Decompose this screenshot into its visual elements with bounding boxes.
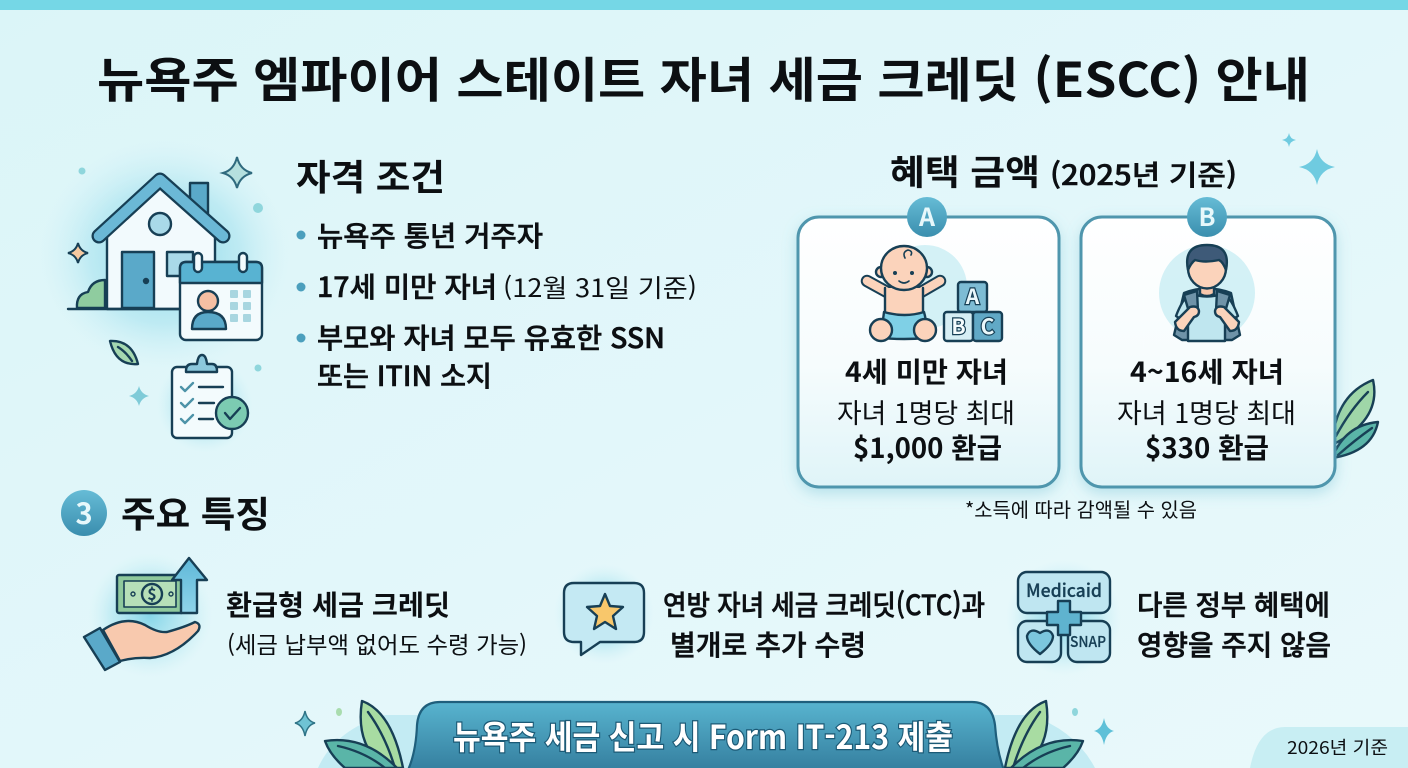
icon: side leaves bbox=[1332, 380, 1378, 458]
icon: right leaves and sparkle bbox=[1005, 701, 1114, 768]
banner text: 뉴욕주 세금 신고 시 Form IT-213 제출 bbox=[453, 711, 953, 759]
panel: eligibility bbox=[296, 149, 697, 395]
panel: benefit amounts bbox=[798, 133, 1378, 523]
text: separate: 별개로 추가 수령 bbox=[670, 624, 866, 664]
text: refundable bbox=[226, 584, 527, 660]
text: card A: 자녀 1명당 최대 bbox=[837, 392, 1015, 431]
card A bbox=[798, 197, 1059, 487]
text: separate bbox=[663, 584, 985, 664]
heading: benefit amounts: (2025년 기준) bbox=[1050, 154, 1237, 194]
bullet: SSN or ITIN bbox=[296, 317, 665, 395]
feature: refundable bbox=[84, 553, 527, 677]
panel: key features bbox=[61, 486, 1331, 677]
icon: Medicaid and SNAP tiles: Medicaid bbox=[1026, 577, 1102, 603]
bullet: age bbox=[296, 266, 697, 306]
icon: child with backpack bbox=[1159, 245, 1255, 341]
icon: clipboard checklist bbox=[172, 355, 248, 438]
text: no impact: 영향을 주지 않음 bbox=[1137, 624, 1331, 664]
date tag: 2026년 기준 bbox=[1287, 734, 1388, 760]
card B bbox=[1081, 197, 1335, 487]
text: card B bbox=[1117, 351, 1296, 467]
text: refundable: (세금 납부액 없어도 수령 가능) bbox=[227, 626, 527, 660]
text: card A: 4세 미만 자녀 bbox=[845, 351, 1008, 391]
icon: Medicaid and SNAP tiles: SNAP bbox=[1070, 631, 1106, 652]
bullet: age: 17세 미만 자녀 bbox=[317, 266, 497, 306]
text: separate: 연방 자녀 세금 크레딧(CTC)과 bbox=[663, 584, 985, 624]
feature: no impact on other benefits bbox=[1006, 560, 1331, 676]
icon: Medicaid and SNAP tiles bbox=[1006, 560, 1122, 676]
text: card A bbox=[837, 351, 1015, 467]
text: refundable: 환급형 세금 크레딧 bbox=[226, 584, 450, 624]
icon: sparkles top right bbox=[1282, 133, 1335, 185]
banner: filing instruction bbox=[295, 701, 1114, 768]
heading: key features: 주요 특징 bbox=[121, 486, 270, 538]
text: no impact bbox=[1137, 584, 1331, 664]
icon: speech bubble with star bbox=[554, 564, 654, 664]
icon: baby and blocks: C bbox=[981, 311, 995, 341]
heading: benefit amounts: 혜택 금액 bbox=[890, 145, 1040, 196]
feature: separate from federal credit bbox=[554, 564, 985, 664]
text: card B: $330 환급 bbox=[1145, 427, 1269, 467]
icon: calendar with person bbox=[180, 253, 262, 340]
text: card B: 4~16세 자녀 bbox=[1130, 351, 1284, 391]
bullet: SSN or ITIN: 또는 ITIN 소지 bbox=[317, 355, 492, 395]
footnote: *소득에 따라 감액될 수 있음 bbox=[965, 494, 1197, 523]
date tag bbox=[1250, 727, 1408, 768]
heading: eligibility: 자격 조건 bbox=[296, 149, 445, 201]
icon: left leaves and sparkle bbox=[295, 701, 403, 768]
badge B bbox=[1187, 197, 1227, 237]
title: 뉴욕주 엠파이어 스테이트 자녀 세금 크레딧 (ESCC) 안내 bbox=[97, 41, 1310, 111]
bullet: age: (12월 31일 기준) bbox=[503, 269, 697, 305]
icon: hand with money and arrow: $ bbox=[147, 581, 157, 605]
icon: baby and blocks: A bbox=[965, 281, 980, 311]
icon: baby and blocks: B bbox=[951, 311, 966, 341]
badge B: B bbox=[1198, 198, 1216, 234]
badge A: A bbox=[918, 198, 936, 234]
top accent bar bbox=[0, 0, 1408, 10]
badge A bbox=[907, 197, 947, 237]
bullet: SSN or ITIN: 부모와 자녀 모두 유효한 SSN bbox=[317, 317, 665, 357]
icon: hand with money and arrow bbox=[84, 553, 212, 677]
text: no impact: 다른 정부 혜택에 bbox=[1137, 584, 1330, 624]
text: card B: 자녀 1명당 최대 bbox=[1117, 392, 1296, 431]
icon: baby and blocks bbox=[867, 245, 1002, 341]
bullet: residency: 뉴욕주 통년 거주자 bbox=[317, 215, 543, 255]
heading: benefit amounts bbox=[890, 145, 1237, 196]
icon: sparkles and dots bbox=[68, 157, 263, 406]
banner shape bbox=[408, 702, 1004, 768]
heading: key features bbox=[61, 486, 270, 538]
text: card A: $1,000 환급 bbox=[853, 427, 1002, 467]
illustration: house, calendar and checklist bbox=[40, 140, 290, 453]
heading: key features: 3 bbox=[75, 491, 93, 533]
icon: leaf bbox=[110, 341, 138, 364]
icon: house bbox=[68, 180, 223, 309]
